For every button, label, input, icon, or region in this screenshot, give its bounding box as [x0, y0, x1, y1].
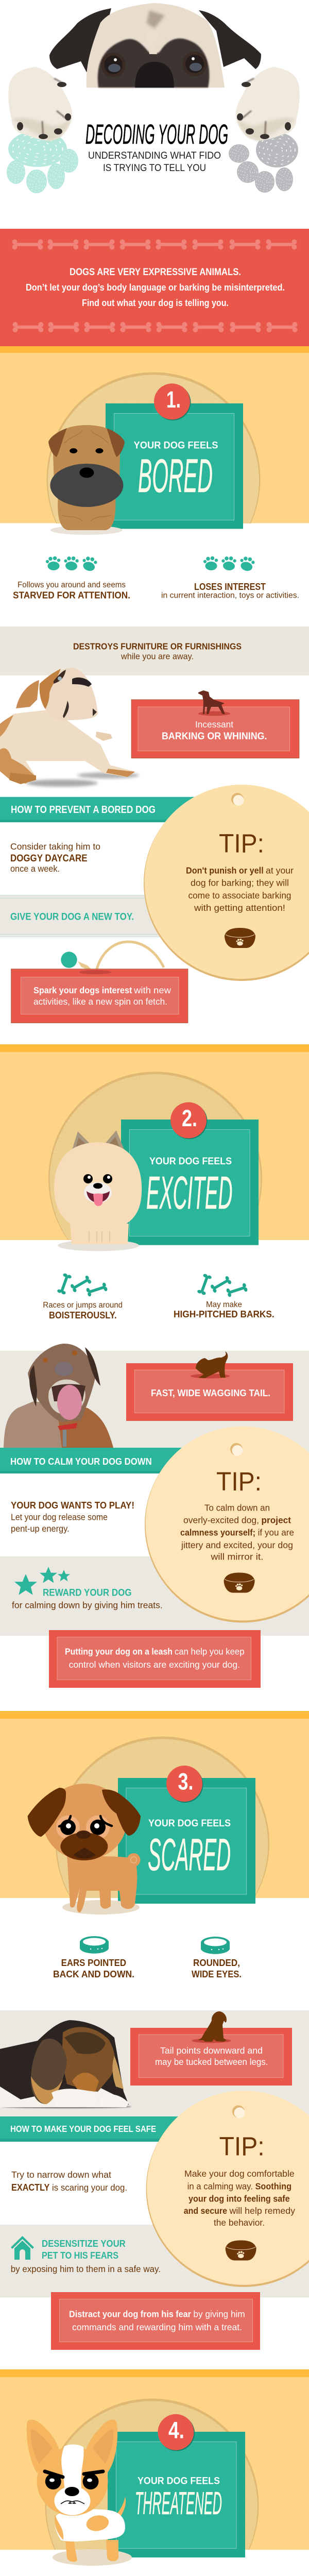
callout: barking: BARKING OR WHINING.	[162, 731, 267, 742]
callout: fast wagging tail	[126, 1351, 293, 1421]
card: BORED	[138, 450, 213, 502]
tip disc: if you are	[258, 1528, 294, 1538]
card: YOUR DOG FEELS	[148, 1818, 231, 1829]
icon: stars	[14, 1567, 70, 1595]
text: ears pointed	[53, 1957, 134, 1979]
tip disc: and secure	[184, 2206, 227, 2216]
icon: dog house	[11, 2236, 34, 2260]
number badge: 2.	[182, 1105, 197, 1131]
tip disc: dog for barking; they will	[191, 878, 289, 888]
text: loses interest: in current interaction, toys or activities.	[161, 591, 299, 600]
panel: destroys furniture band: while you are away.	[121, 652, 194, 662]
text: doggy daycare	[10, 841, 100, 874]
heading band: HOW TO MAKE YOUR DOG FEEL SAFE	[10, 2124, 156, 2134]
tip disc: calmness yourself;	[180, 1528, 255, 1538]
callout: distract: commands and rewarding him with a treat.	[72, 2322, 242, 2332]
icon: beagle puppy photo	[0, 2020, 131, 2108]
tip disc: project	[262, 1515, 291, 1525]
panel: make dog feel safe how-to	[0, 2091, 309, 2350]
callout: tail down	[130, 2011, 292, 2086]
heading band	[0, 797, 206, 822]
text: rounded eyes: WIDE EYES.	[192, 1969, 242, 1979]
number badge	[166, 1766, 203, 1803]
tip disc: at your	[266, 866, 294, 876]
text: boisterously: Races or jumps around	[43, 1301, 123, 1310]
card	[118, 1778, 255, 1904]
icon: collar right	[201, 1937, 230, 1954]
text: high pitched barks: HIGH-PITCHED BARKS.	[174, 1309, 274, 1319]
number badge	[158, 2414, 195, 2451]
panel: intro band	[0, 229, 309, 346]
icon: chocolate lab photo	[4, 1344, 113, 1448]
text: desensitize: DESENSITIZE YOUR	[42, 2238, 126, 2249]
icon: food bowl	[226, 2240, 256, 2261]
circle backdrop	[48, 1072, 262, 1240]
callout: leash: Putting your dog on a leash	[65, 1647, 173, 1657]
icon: sitting puppy silhouette	[198, 2011, 227, 2042]
heading band	[0, 2116, 206, 2142]
text: loses interest: LOSES INTEREST	[194, 581, 266, 592]
panel: section 2 symptom columns	[43, 1273, 274, 1320]
text: boisterously	[43, 1301, 123, 1320]
number badge: 3.	[178, 1769, 194, 1795]
text: wants to play: pent-up energy.	[11, 1523, 70, 1534]
callout: distract: by giving him	[193, 2309, 245, 2319]
text: doggy daycare: DOGGY DAYCARE	[10, 853, 88, 864]
icon: standing dog silhouette	[198, 690, 225, 714]
callout: fast wagging tail: FAST, WIDE WAGGING TAIL.	[151, 1387, 270, 1398]
card: YOUR DOG FEELS	[134, 440, 218, 451]
icon: teal bones right	[197, 1273, 248, 1297]
text: desensitize: by exposing him to them in a safe way.	[11, 2264, 161, 2274]
panel: section 3 symptom columns	[53, 1936, 242, 1979]
icon: left paw	[8, 67, 72, 141]
icon: teal bones left	[57, 1273, 108, 1297]
tip disc: Soothing	[255, 2181, 291, 2192]
icon: pomeranian cartoon dog	[54, 1130, 142, 1251]
title: UNDERSTANDING WHAT FIDO	[88, 150, 221, 161]
panel: section 1 bored hero	[0, 346, 309, 535]
text: desensitize: PET TO HIS FEARS	[42, 2250, 118, 2261]
panel: section 3 scared hero	[0, 1711, 309, 1914]
text: narrow down: is scaring your dog.	[52, 2182, 127, 2193]
intro text: DOGS ARE VERY EXPRESSIVE ANIMALS.	[70, 267, 241, 278]
icon: bulldog photo	[0, 668, 139, 787]
band: new toy	[0, 895, 206, 937]
icon: right paw	[236, 67, 300, 141]
panel: calm excited dog how-to	[0, 1426, 309, 1688]
callout: tail down: Tail points downward and	[160, 2045, 263, 2056]
text: wants to play: Let your dog release some	[11, 1512, 108, 1522]
card	[106, 403, 243, 529]
text: wants to play	[11, 1500, 134, 1534]
icon: food bowl	[224, 1572, 255, 1593]
intro text: Find out what your dog is telling you.	[82, 297, 229, 308]
tip disc: the behavior.	[214, 2217, 265, 2228]
tip disc: with getting attention!	[194, 903, 285, 913]
text: doggy daycare: once a week.	[10, 863, 60, 874]
tip disc: jittery and excited, your dog	[181, 1540, 293, 1550]
circle backdrop	[56, 1736, 269, 1898]
card: YOUR DOG FEELS	[138, 2476, 220, 2487]
icon: bottom row of bones	[12, 322, 298, 332]
text: narrow down: Try to narrow down what	[11, 2170, 111, 2180]
text: desensitize	[11, 2238, 161, 2274]
tip disc: TIP:	[219, 828, 264, 858]
tip disc: your dog into feeling safe	[188, 2194, 290, 2204]
text: reward your dog: REWARD YOUR DOG	[43, 1588, 132, 1599]
panel: section 2 excited hero	[0, 1044, 309, 1251]
panel: section 4 threatened hero	[0, 2369, 309, 2576]
header: pug photo holding sign	[7, 3, 300, 193]
text: reward your dog	[12, 1588, 163, 1611]
number badge: 1.	[166, 386, 181, 413]
text: boisterously: BOISTEROUSLY.	[49, 1310, 117, 1320]
icon: teal paws right	[203, 555, 256, 572]
icon: playing puppy silhouette	[196, 1351, 228, 1378]
text: narrow down: EXACTLY	[11, 2182, 49, 2193]
tip disc	[146, 2091, 309, 2287]
callout: distract	[51, 2292, 260, 2350]
icon: collar left	[80, 1936, 109, 1954]
text: loses interest	[161, 581, 299, 600]
text: starved for attention	[13, 581, 130, 601]
callout: barking: Incessant	[195, 719, 233, 730]
callout: new activities: Spark your dogs interest	[33, 985, 132, 995]
card: YOUR DOG FEELS	[149, 1156, 232, 1167]
callout: barking	[131, 690, 299, 758]
heading band: HOW TO CALM YOUR DOG DOWN	[10, 1456, 152, 1467]
band: texture lower	[0, 1556, 309, 1636]
band: section 2 texture	[0, 1351, 309, 1456]
tip disc: will mirror it.	[210, 1552, 264, 1562]
tip disc: TIP:	[219, 2131, 265, 2161]
number badge	[154, 383, 191, 420]
heading band: HOW TO PREVENT A BORED DOG	[11, 804, 156, 816]
icon: teal paws left	[46, 555, 98, 572]
icon: chihuahua cartoon dog	[27, 2419, 132, 2566]
panel: prevent bored dog how-to	[0, 785, 309, 1023]
panel: destroys furniture band	[0, 626, 309, 675]
intro text	[26, 267, 285, 308]
callout: leash: can help you keep	[175, 1647, 244, 1657]
tip disc: Don't punish or yell	[186, 866, 264, 876]
text: starved for attention: STARVED FOR ATTENTION.	[13, 590, 130, 601]
text: reward your dog: for calming down by giving him treats.	[12, 1600, 163, 1611]
band: texture lower	[0, 2225, 309, 2297]
callout: new activities	[11, 969, 188, 1023]
icon: rope and ball toy	[61, 942, 164, 973]
text: rounded eyes	[192, 1957, 242, 1979]
tip disc: Make your dog comfortable	[184, 2168, 295, 2179]
tip disc: TIP:	[216, 1467, 262, 1496]
circle backdrop	[45, 2399, 259, 2550]
panel: destroys furniture band: DESTROYS FURNITURE OR FURNISHINGS	[73, 641, 242, 652]
text: high pitched barks: May make	[206, 1300, 242, 1309]
band: section 3 texture	[0, 2010, 309, 2116]
text: ears pointed: BACK AND DOWN.	[53, 1969, 134, 1979]
callout: leash	[49, 1630, 261, 1688]
callout: new activities: activities, like a new spin on fetch.	[33, 996, 167, 1007]
number badge: 4.	[168, 2417, 184, 2444]
callout: leash: control when visitors are exciting your dog.	[69, 1659, 240, 1670]
heading band	[0, 1448, 206, 1473]
icon: pug head	[49, 3, 261, 88]
tip disc	[144, 785, 309, 981]
text: doggy daycare: Consider taking him to	[10, 841, 100, 852]
tip disc: overly-excited dog,	[183, 1515, 259, 1525]
icon: shar-pei cartoon dog	[48, 425, 125, 535]
icon: food bowl	[225, 928, 255, 948]
card	[108, 2432, 245, 2557]
card	[121, 1120, 259, 1245]
panel: section 1 symptom columns	[13, 555, 299, 601]
text: rounded eyes: ROUNDED,	[193, 1957, 240, 1968]
tip disc: To calm down an	[204, 1503, 270, 1513]
callout: tail down: may be tucked between legs.	[155, 2057, 268, 2067]
text: ears pointed: EARS POINTED	[61, 1957, 126, 1968]
tip disc: will help remedy	[229, 2206, 295, 2216]
text: narrow down	[11, 2170, 127, 2193]
tip disc	[145, 1426, 309, 1623]
tip disc: come to associate barking	[188, 890, 291, 901]
circle backdrop	[46, 372, 261, 523]
callout: distract: Distract your dog from his fear	[69, 2309, 191, 2319]
icon: grey scribble paw print	[229, 132, 298, 193]
icon: mint scribble paw print	[7, 131, 78, 193]
text: starved for attention: Follows you around and seems	[18, 581, 126, 589]
icon: pug puppy cartoon dog	[28, 1784, 141, 1914]
text: wants to play: YOUR DOG WANTS TO PLAY!	[11, 1500, 134, 1511]
callout: new activities: with new	[133, 985, 171, 995]
text: high pitched barks	[174, 1300, 274, 1319]
title: IS TRYING TO TELL YOU	[103, 163, 206, 174]
number badge	[170, 1102, 207, 1139]
band: new toy: GIVE YOUR DOG A NEW TOY.	[10, 912, 134, 923]
tip disc: in a calming way.	[187, 2181, 253, 2192]
title	[85, 119, 228, 174]
icon: top row of bones	[12, 239, 297, 249]
